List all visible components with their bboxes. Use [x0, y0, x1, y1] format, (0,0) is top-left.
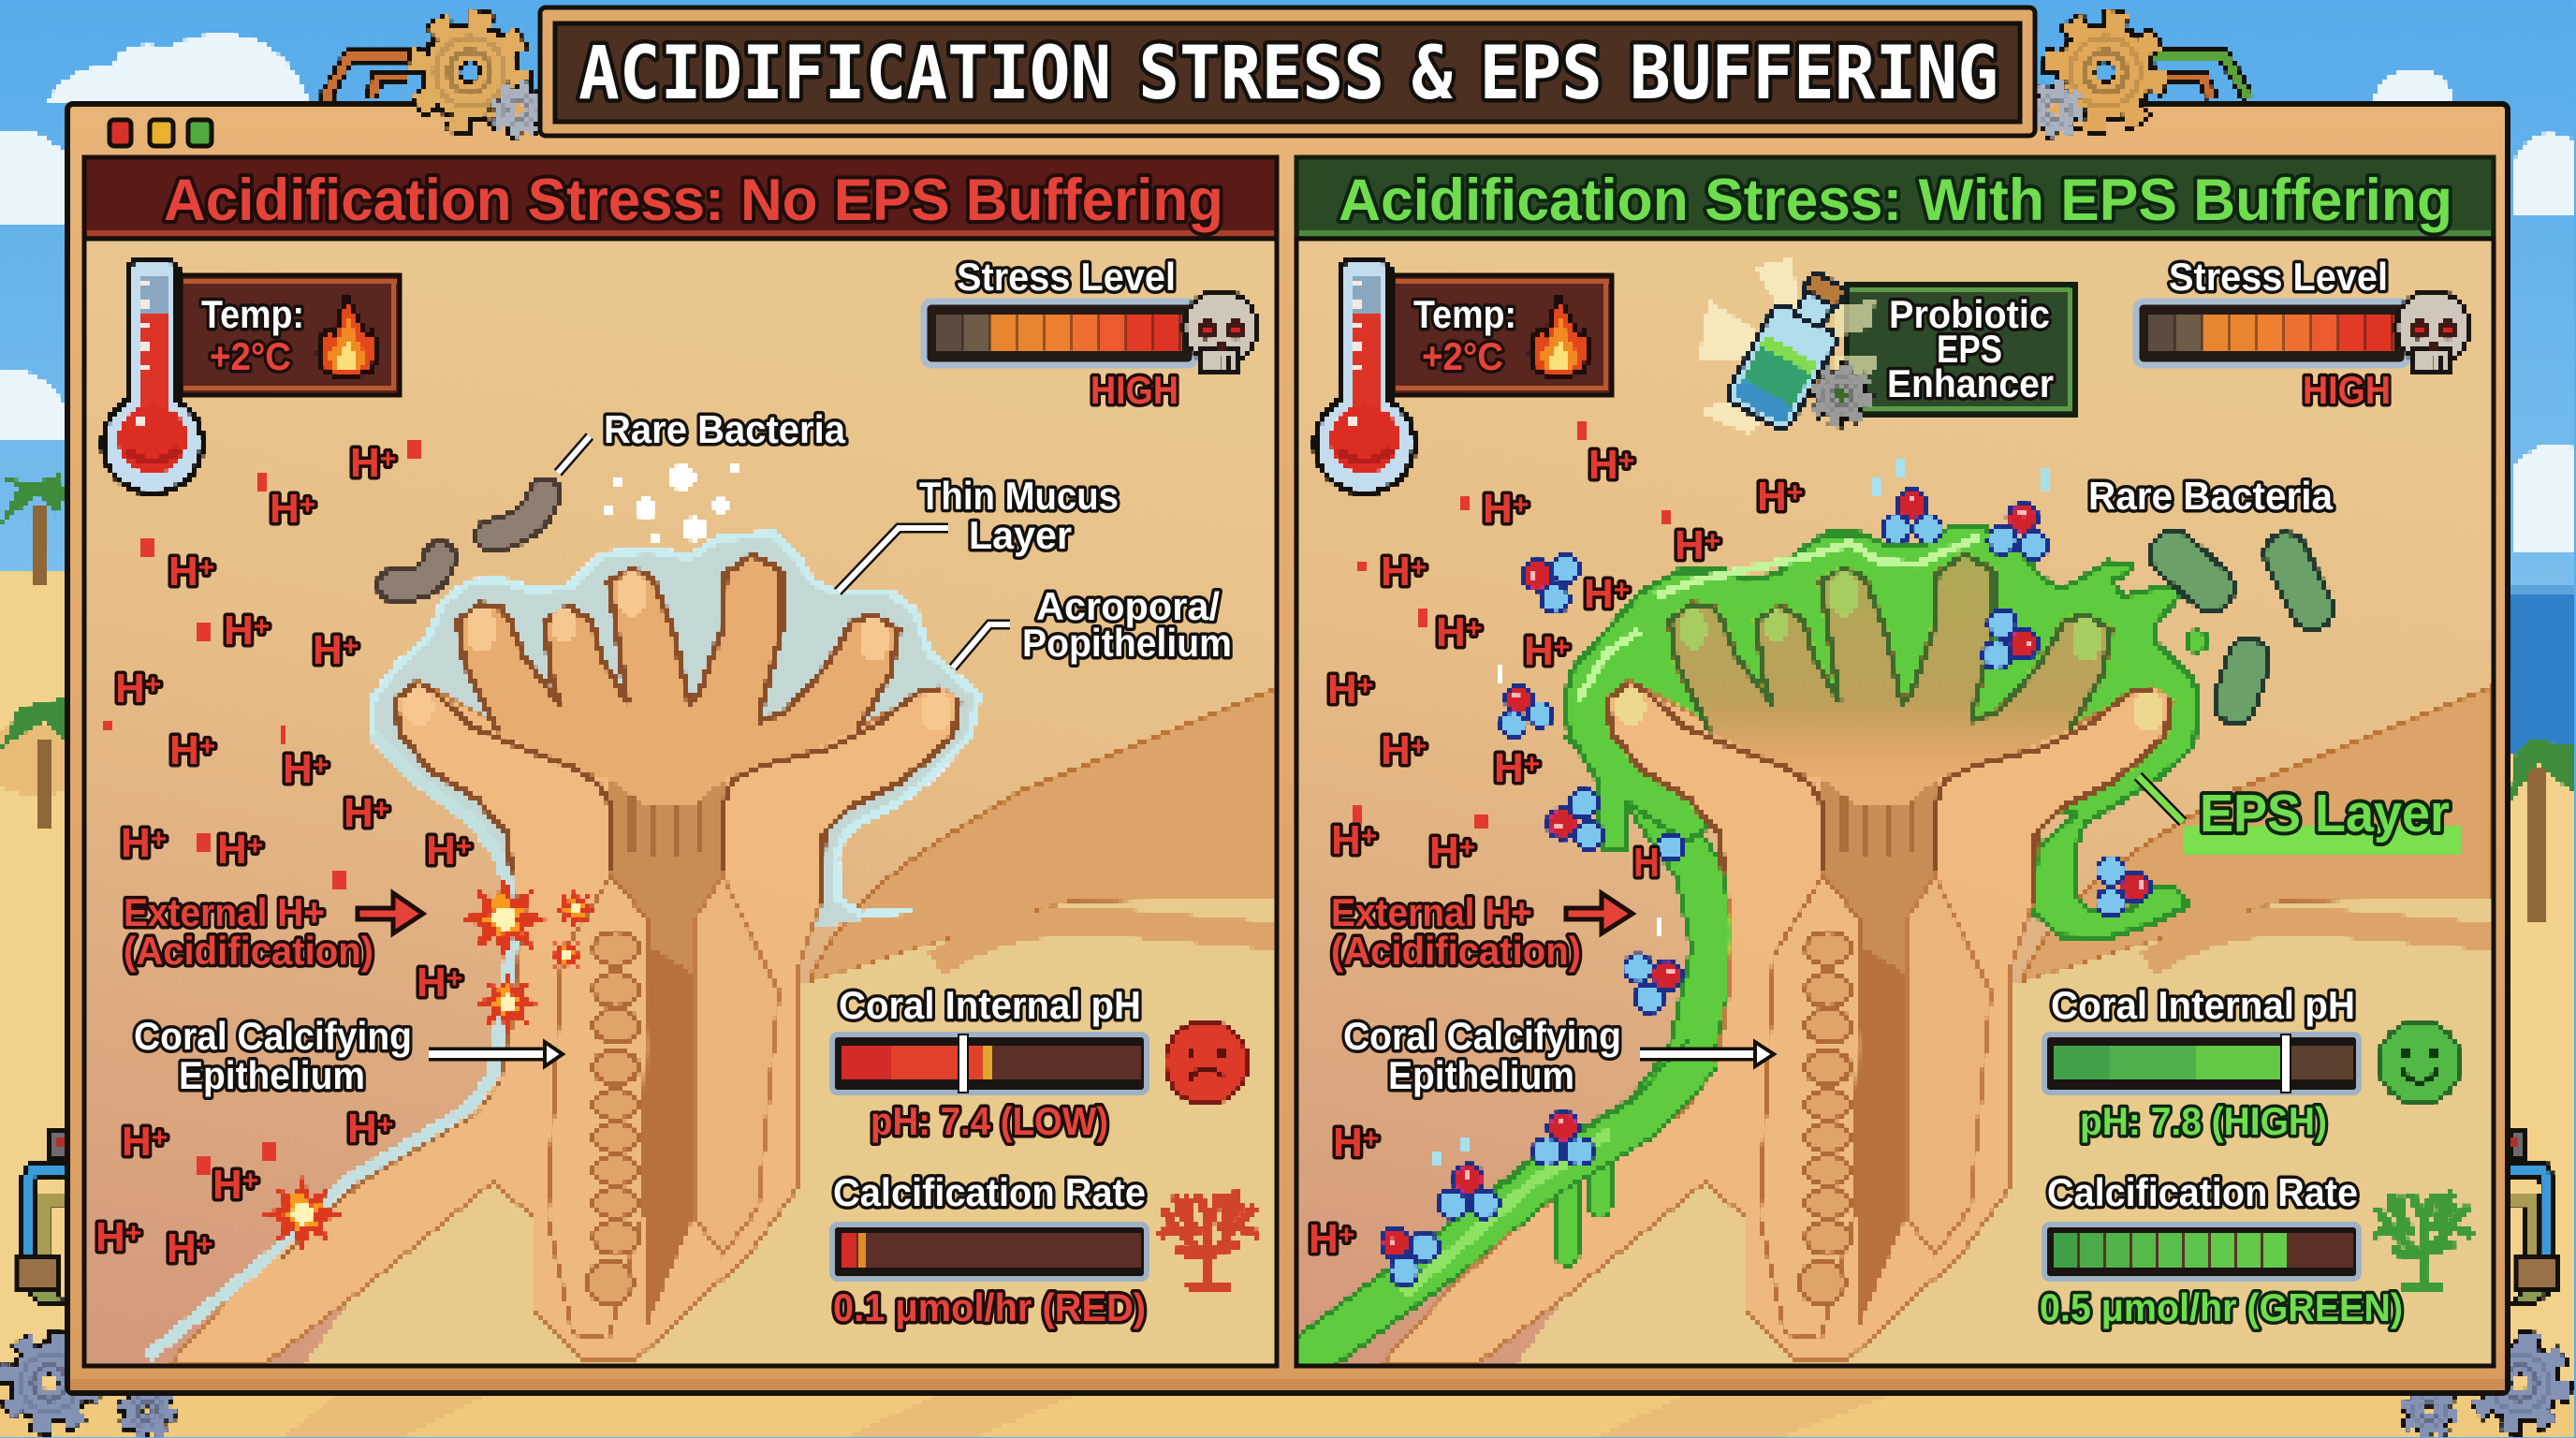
- decorative side pipes and boxes: [19, 1129, 2557, 1303]
- hydrogen ions: with EPS: H: [1327, 667, 1357, 712]
- label: EPS layer: EPS Layer: [2200, 784, 2450, 844]
- hydrogen ions: no EPS: +: [152, 1123, 168, 1153]
- hydrogen ions: no EPS: H: [95, 1214, 125, 1260]
- hydrogen ions: with EPS: H: [1429, 829, 1459, 874]
- icon: happy face: [2378, 1021, 2461, 1104]
- hydrogen ions: no EPS: H: [350, 440, 380, 486]
- hydrogen ions: no EPS: +: [254, 611, 270, 642]
- stress level gauge: [924, 255, 1257, 412]
- label: rare bacteria: [558, 407, 846, 473]
- gauge: calcification rate low: 0.1 μmol/hr (RED): [833, 1285, 1146, 1329]
- label and arrow: coral calcifying epithelium: Coral Calcifying: [134, 1014, 412, 1058]
- hydrogen ions: no EPS: +: [197, 1229, 212, 1260]
- panel outline: [1296, 239, 2494, 1366]
- label: acropora popithelium: Acropora/: [1036, 584, 1220, 628]
- hydrogen ions: no EPS: +: [247, 830, 263, 861]
- hydrogen ions: with EPS: +: [1339, 1220, 1354, 1251]
- hydrogen ions: no EPS: H: [344, 790, 373, 836]
- hydrogen ions: no EPS: +: [377, 1109, 393, 1140]
- panel header: with EPS: Acidification Stress: With EPS Buffering: [1339, 168, 2452, 233]
- label and arrow: external H+: External H+: [1331, 890, 1532, 934]
- hydrogen ions: no EPS: H: [313, 627, 343, 673]
- stress level gauge: HIGH: [1090, 368, 1178, 412]
- label: thin mucus layer: Thin Mucus: [919, 474, 1119, 518]
- top left pipes: [328, 56, 424, 101]
- hydrogen ions: with EPS: H: [1633, 840, 1660, 886]
- panel header: no EPS: Acidification Stress: No EPS Buffering: [164, 168, 1223, 233]
- hydrogen ions: with EPS: H: [1494, 745, 1524, 791]
- hydrogen ions: no EPS: H: [115, 666, 145, 712]
- gauge: calcification rate low: [832, 1170, 1256, 1329]
- hydrogen ions: no EPS: H: [283, 746, 313, 792]
- hydrogen ions: no EPS: H: [122, 1119, 152, 1165]
- hydrogen ions: with EPS: +: [1411, 731, 1427, 762]
- hydrogen ions: no EPS: H: [426, 828, 456, 873]
- probiotic EPS enhancer: [1699, 257, 2075, 435]
- gauge: coral internal pH low: [832, 983, 1248, 1143]
- hydrogen ions: with EPS: H: [1584, 571, 1614, 617]
- hydrogen ions: with EPS: +: [1614, 575, 1630, 606]
- label and arrow: external H+: External H+: [124, 890, 325, 934]
- thermometer with temperature readout: [1315, 258, 1612, 493]
- gauge: calcification rate high: Calcification Rate: [2047, 1170, 2358, 1214]
- hydrogen ions: with EPS: H: [1436, 609, 1466, 655]
- hydrogen ions: with EPS: +: [1513, 490, 1529, 521]
- gears: top right: [2031, 20, 2158, 134]
- label and arrow: external H+: (Acidification): [1331, 929, 1581, 973]
- hydrogen ions: with EPS: +: [1363, 1123, 1379, 1154]
- hydrogen ions: with EPS: H: [1331, 817, 1361, 863]
- label: thin mucus layer: Layer: [969, 513, 1072, 557]
- stress level gauge: Stress Level: [2169, 255, 2388, 299]
- gears: top left: [417, 20, 543, 134]
- thermometer with temperature readout: Temp:: [1413, 292, 1516, 336]
- hydrogen ions: with EPS: +: [1524, 749, 1540, 780]
- stress level gauge: HIGH: [2303, 368, 2391, 412]
- hydrogen ions: with EPS: +: [1357, 670, 1373, 701]
- gauge: calcification rate high: 0.5 μmol/hr (GREEN): [2040, 1285, 2403, 1329]
- hydrogen ions: no EPS: H: [212, 1162, 242, 1208]
- hydrogen ions: no EPS: +: [125, 1218, 141, 1249]
- label: rare bacteria: Rare Bacteria: [2088, 474, 2334, 518]
- hydrogen ions: with EPS: +: [1411, 552, 1427, 583]
- label: thin mucus layer: [838, 474, 1119, 592]
- hydrogen ions: with EPS: +: [1459, 832, 1475, 863]
- hydrogen ions: with EPS: +: [1554, 632, 1570, 663]
- hydrogen ions: no EPS: +: [199, 731, 215, 762]
- hydrogen ions: with EPS: H: [1381, 549, 1411, 594]
- hydrogen ions: no EPS: H: [168, 549, 198, 594]
- icon: glowing bottle and gear: [1724, 263, 1879, 433]
- hydrogen ions: with EPS: H: [1524, 628, 1554, 674]
- hydrogen ions: no EPS: H: [417, 960, 446, 1005]
- title banner: [540, 7, 2035, 136]
- label and arrow: external H+: [124, 890, 423, 973]
- label: acropora popithelium: [953, 584, 1232, 668]
- hydrogen ions: no EPS: H: [167, 1225, 197, 1271]
- thermometer with temperature readout: Temp:: [201, 292, 304, 336]
- title banner: ACIDIFICATION STRESS & EPS BUFFERING: [578, 32, 1998, 116]
- label and arrow: coral calcifying epithelium: Epithelium: [179, 1053, 365, 1097]
- hydrogen ions: with EPS: +: [1466, 613, 1482, 644]
- label: acropora popithelium: Popithelium: [1022, 621, 1232, 665]
- hydrogen ions: with EPS: H: [1757, 474, 1787, 520]
- panel: with EPS buffering: [1296, 157, 2494, 1372]
- icon: bleached red coral: [1163, 1195, 1256, 1286]
- hydrogen ions: no EPS: H: [217, 827, 247, 873]
- hydrogen ions: with EPS: H: [1588, 442, 1618, 488]
- scene details: bacteria, sparkles, bursts: [105, 440, 741, 1252]
- hydrogen ions: with EPS: +: [1361, 821, 1377, 852]
- probiotic EPS enhancer: EPS: [1937, 327, 2002, 371]
- probiotic EPS enhancer: Probiotic: [1889, 292, 2050, 336]
- thermometer with temperature readout: +2°C: [210, 334, 291, 378]
- top right pipes: [2150, 55, 2248, 98]
- label and arrow: coral calcifying epithelium: [1343, 1014, 1774, 1097]
- hydrogen ions: no EPS: +: [343, 631, 359, 662]
- panel outline: [84, 239, 1277, 1366]
- hydrogen ions: no EPS: +: [313, 750, 329, 781]
- hydrogen ions: no EPS: +: [242, 1166, 258, 1196]
- hydrogen ions: with EPS: H: [1333, 1120, 1363, 1166]
- hydrogen ions: with EPS: +: [1618, 446, 1634, 477]
- hydrogen ions: no EPS: +: [300, 490, 315, 521]
- gauge: coral internal pH high: [2044, 983, 2461, 1143]
- hydrogen ions: no EPS: H: [270, 486, 300, 532]
- icon: sad face: [1165, 1021, 1248, 1104]
- hydrogen ions: no EPS: H: [121, 820, 151, 866]
- hydrogen ions: no EPS: +: [456, 831, 472, 862]
- panel: no EPS buffering: [84, 157, 1281, 1372]
- hydrogen ions: with EPS: H: [1381, 727, 1411, 773]
- hydrogen ions: no EPS: +: [380, 444, 396, 475]
- label and arrow: coral calcifying epithelium: [134, 1014, 563, 1097]
- hydrogen ions: no EPS: +: [198, 552, 214, 583]
- scene: coral with thin mucus layer: [84, 239, 1281, 1372]
- hydrogen ions: with EPS: [1309, 442, 1803, 1262]
- hydrogen ions: no EPS: H: [169, 727, 199, 773]
- label and arrow: external H+: (Acidification): [124, 929, 373, 973]
- label and arrow: coral calcifying epithelium: Coral Calcifying: [1343, 1014, 1621, 1058]
- stress level gauge: Stress Level: [957, 255, 1176, 299]
- gauge: calcification rate low: Calcification Rate: [833, 1170, 1146, 1214]
- label: EPS layer: [2138, 776, 2462, 855]
- stress level gauge: [2136, 255, 2469, 412]
- icon: healthy green coral: [2377, 1195, 2470, 1286]
- hydrogen ions: no EPS: H: [347, 1106, 377, 1152]
- probiotic EPS enhancer: Enhancer: [1887, 361, 2054, 405]
- window buttons: [110, 120, 212, 146]
- gauge: coral internal pH low: pH: 7.4 (LOW): [871, 1099, 1108, 1143]
- hydrogen ions: no EPS: H: [224, 608, 254, 653]
- scene details: bacteria, buffer molecules: [1353, 423, 2312, 1290]
- label: rare bacteria: Rare Bacteria: [604, 407, 846, 451]
- thermometer with temperature readout: +2°C: [1422, 334, 1503, 378]
- label and arrow: external H+: [1331, 890, 1632, 973]
- gauge: calcification rate high: [2040, 1170, 2470, 1329]
- thermometer with temperature readout: [103, 258, 400, 493]
- scene: coral with EPS slime layer: [1296, 239, 2494, 1372]
- hydrogen ions: no EPS: +: [145, 669, 161, 700]
- gears: bottom: [7, 1340, 2563, 1435]
- hydrogen ions: no EPS: +: [373, 794, 389, 825]
- hydrogen ions: with EPS: H: [1675, 522, 1705, 568]
- hydrogen ions: with EPS: H: [1309, 1216, 1339, 1262]
- hydrogen ions: no EPS: +: [151, 824, 167, 855]
- hydrogen ions: with EPS: H: [1483, 486, 1513, 532]
- hydrogen ions: no EPS: [95, 440, 472, 1271]
- hydrogen ions: with EPS: +: [1705, 526, 1720, 557]
- label and arrow: coral calcifying epithelium: Epithelium: [1388, 1053, 1574, 1097]
- hydrogen ions: no EPS: +: [446, 963, 462, 994]
- gauge: coral internal pH low: Coral Internal pH: [839, 983, 1141, 1027]
- hydrogen ions: with EPS: +: [1787, 477, 1803, 508]
- gauge: coral internal pH high: Coral Internal pH: [2051, 983, 2355, 1027]
- gauge: coral internal pH high: pH: 7.8 (HIGH): [2080, 1099, 2327, 1143]
